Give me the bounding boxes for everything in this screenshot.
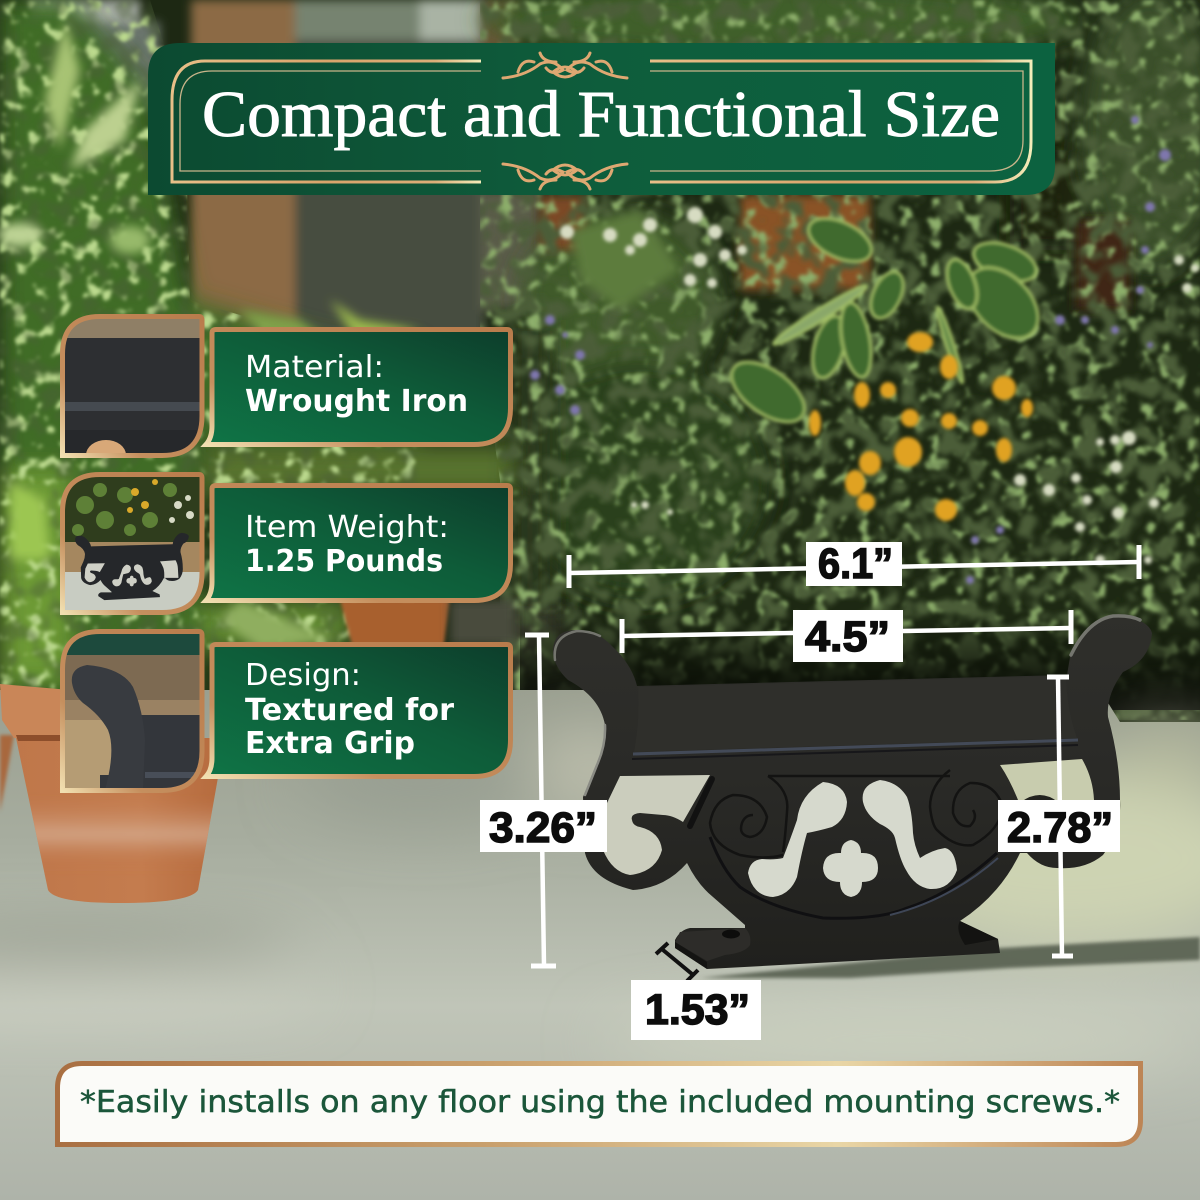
- title banner: [148, 43, 1055, 195]
- dimension: 2.78 inch: 2.78”: [1007, 804, 1113, 852]
- bowl groove: [710, 837, 997, 918]
- background: hedge shadow at floor edge: [520, 610, 1200, 710]
- horn highlights: [555, 616, 1140, 826]
- right S cutout: [863, 780, 957, 889]
- quatrefoil cutout: [823, 840, 878, 897]
- right scroll carving: [930, 770, 1003, 845]
- right opening: [1000, 759, 1097, 852]
- base front edge: [675, 942, 707, 969]
- dimension: 3.26 inch: 3.26”: [489, 804, 597, 852]
- left opening: [603, 775, 710, 875]
- label: item weight: Item Weight:: [245, 510, 449, 545]
- label: item weight: [206, 486, 510, 600]
- icon: bottom ornament: [503, 164, 627, 189]
- panel: material: [60, 315, 510, 470]
- background: hedge: [480, 0, 1200, 600]
- background: terracotta pots: [0, 600, 515, 903]
- background: terracotta pots behind hedge: [540, 195, 1130, 310]
- left S cutout: [748, 782, 847, 897]
- dimension: 6.1 inch: [569, 540, 1139, 588]
- thumbnail: horn close-up: [60, 630, 210, 795]
- bowl groove highlight: [890, 858, 998, 915]
- label: material: Wrought Iron: [245, 384, 468, 419]
- icon: top ornament: [503, 53, 627, 78]
- dimension: 4.5 inch: 4.5”: [805, 613, 890, 661]
- base plate: [675, 928, 750, 961]
- mounting hole: [722, 930, 740, 938]
- background: foliage and flowers: [0, 20, 1199, 650]
- dimension: 3.26 inch: [480, 635, 607, 966]
- footnote banner: [58, 1064, 1140, 1144]
- thumbnail: bar close-up: [60, 314, 204, 458]
- title text: Compact and Functional Size: [202, 78, 1000, 151]
- label: design: [206, 644, 510, 776]
- left scroll carving: [710, 776, 950, 858]
- dimension: 1.53 inch: [631, 943, 761, 1040]
- dimension: 2.78 inch: [998, 677, 1120, 956]
- thumbnail: product in garden: [60, 470, 210, 615]
- background: large hosta leaves: [721, 209, 1052, 434]
- label: item weight: 1.25 Pounds: [245, 544, 443, 579]
- title frame lines: [172, 61, 1031, 182]
- panel: item weight: [60, 470, 510, 615]
- right base wedge: [958, 921, 998, 945]
- background: floor shadow right of product: [700, 937, 1200, 978]
- bar face: [634, 676, 1077, 752]
- dimension: 6.1 inch: 6.1”: [818, 540, 893, 588]
- dimension: 1.53 inch: 1.53”: [645, 986, 750, 1034]
- right hook knob: [1021, 795, 1058, 802]
- background: left foliage base: [0, 0, 565, 700]
- label: design: Extra Grip: [245, 726, 415, 761]
- product silhouette: [553, 615, 1152, 969]
- label: design: Textured for: [245, 693, 454, 728]
- label: material: Material:: [245, 350, 384, 385]
- panel: design: [60, 630, 510, 795]
- background: terrace floor: [0, 690, 1200, 1200]
- label: material: [206, 330, 510, 444]
- background: door, window and wall: [30, 0, 540, 350]
- footnote banner: *Easily installs on any floor using the included mounting screws.*: [80, 1085, 1120, 1120]
- dimension: 4.5 inch: [622, 610, 1071, 662]
- product: cast iron bracket: [553, 615, 1152, 969]
- background: leaf texture: [480, 0, 1200, 720]
- label: design: Design:: [245, 658, 361, 693]
- bar groove highlight: [632, 740, 1078, 759]
